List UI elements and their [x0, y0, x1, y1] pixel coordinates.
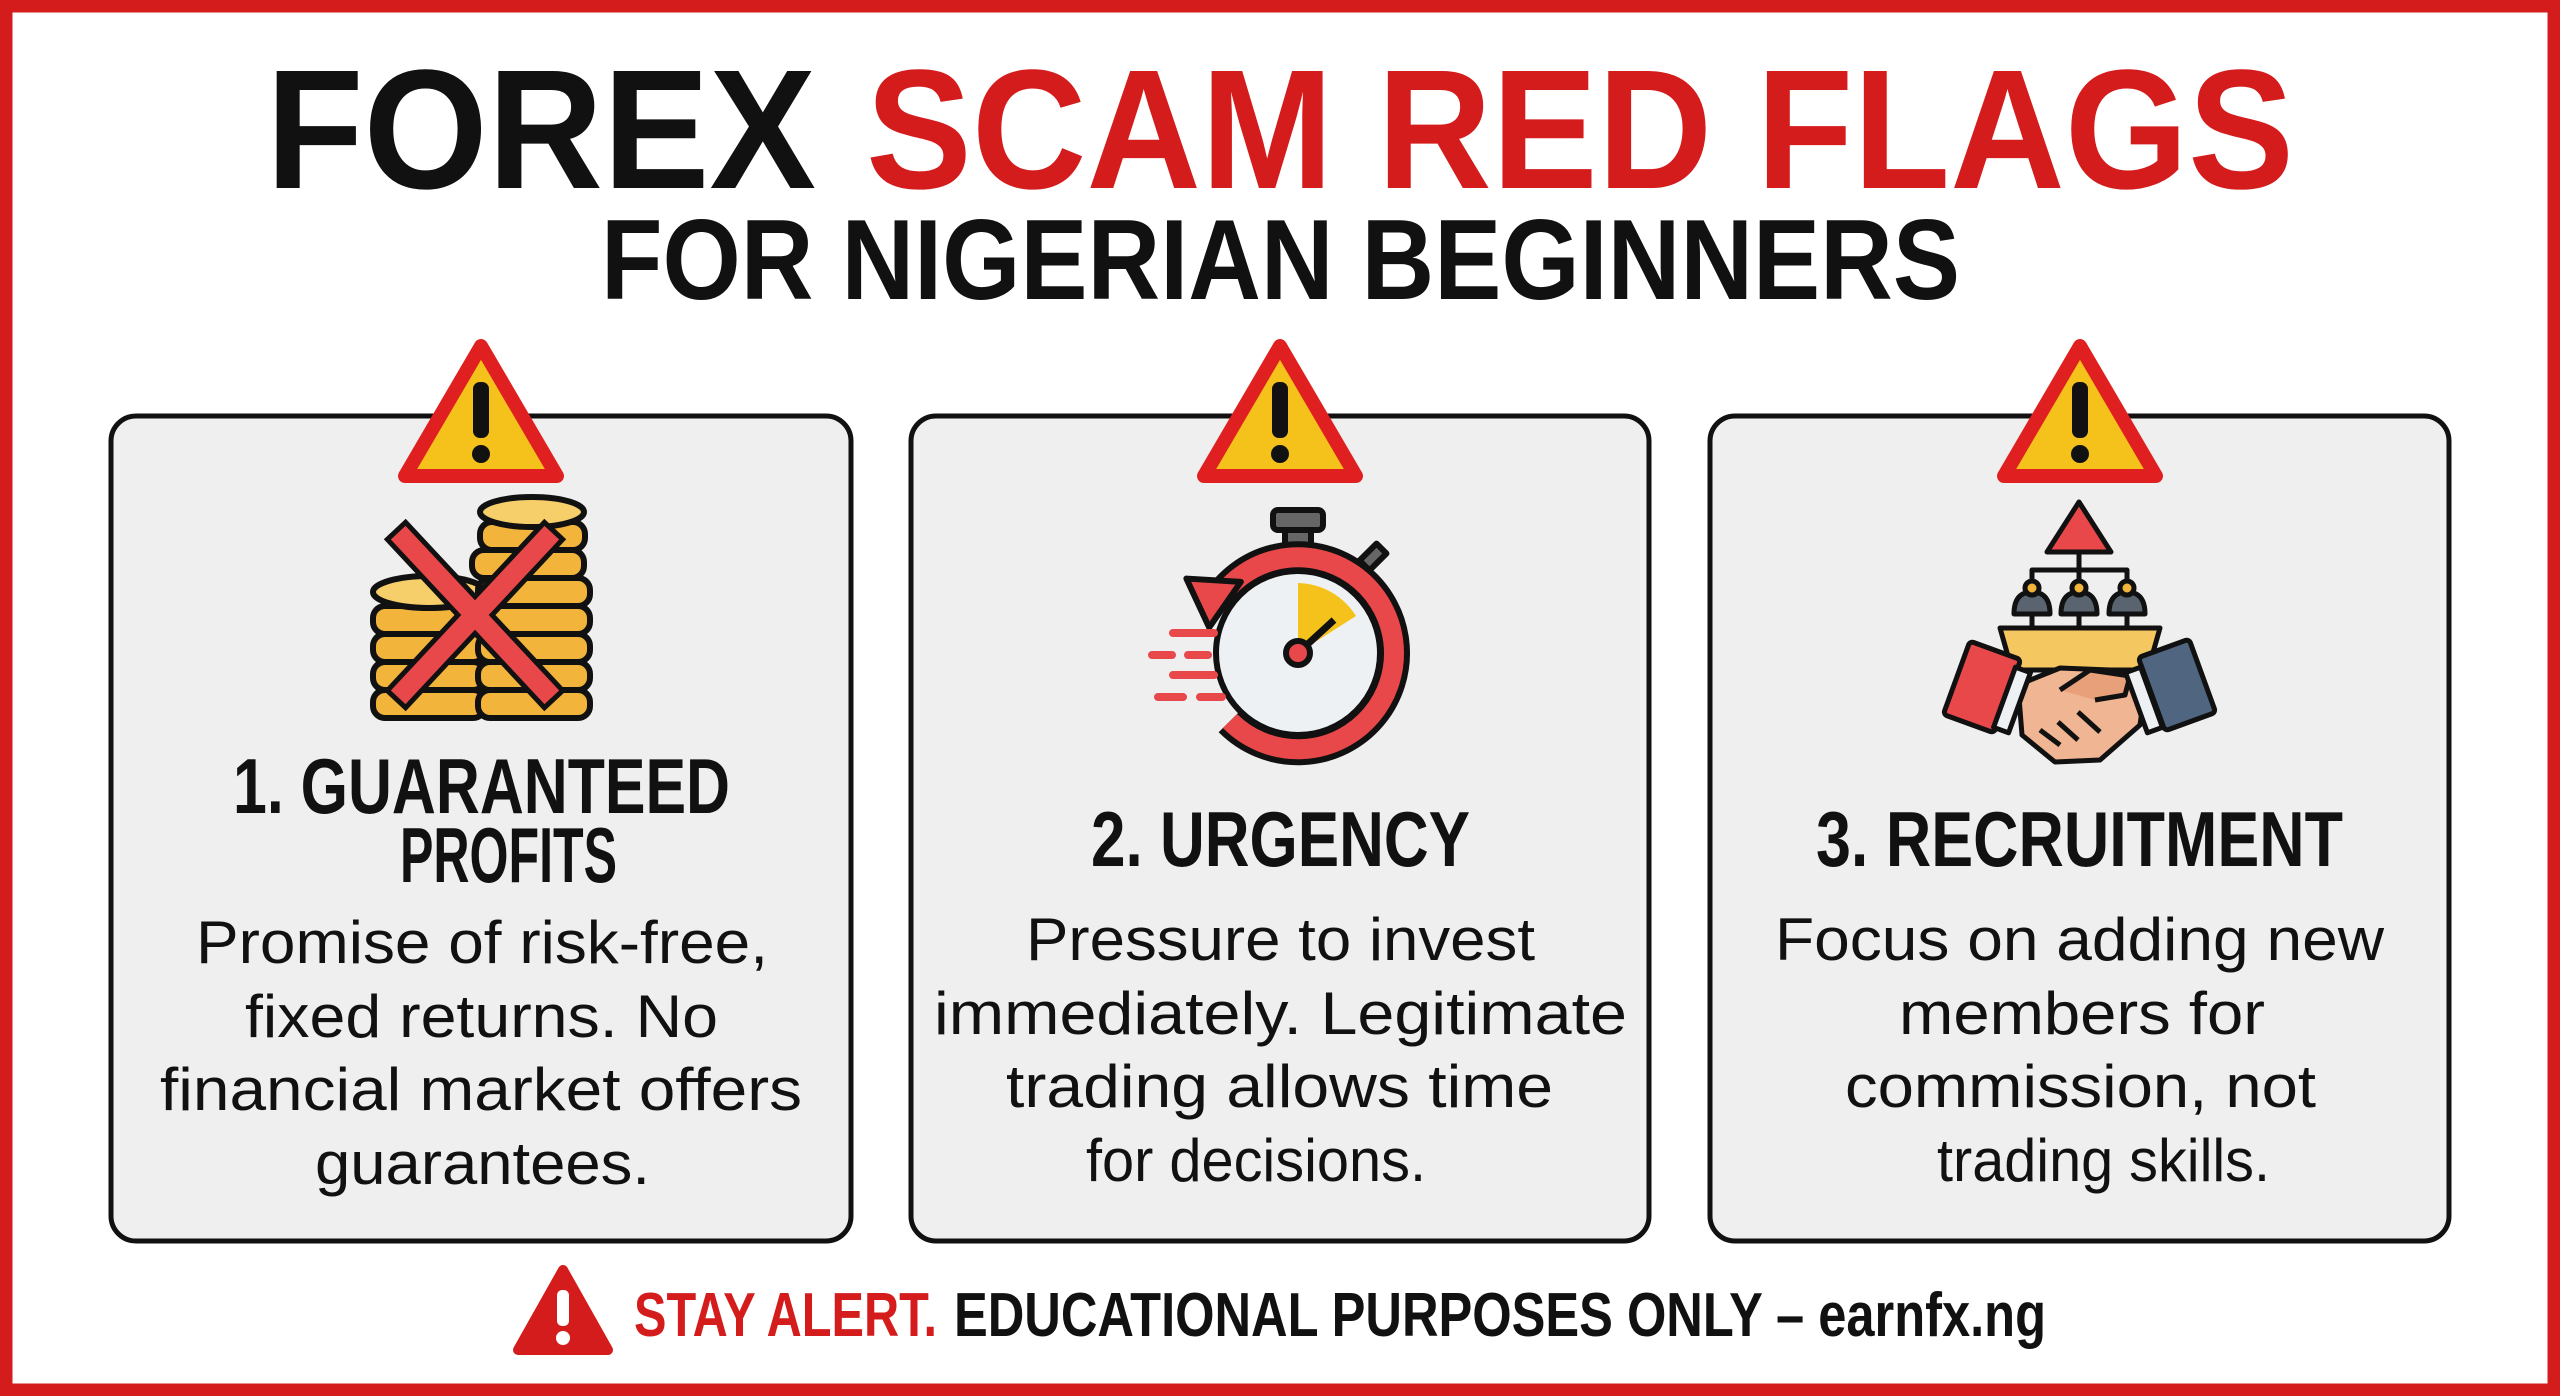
body 2: trading allows time [1006, 1053, 1553, 1120]
footer [518, 1270, 2046, 1350]
body 2: immediately. Legitimate [934, 980, 1627, 1047]
panel: recruitment [1710, 346, 2449, 1241]
icon: coins with red X [373, 497, 590, 718]
icon: warning triangle 1 [405, 346, 557, 476]
body 1: financial market offers [160, 1056, 802, 1123]
body 3: members for [1899, 980, 2265, 1047]
heading 1: PROFITS [400, 811, 617, 899]
heading 2: 2. URGENCY [1091, 795, 1470, 883]
heading 1 [233, 742, 730, 899]
body 1: fixed returns. No [245, 983, 718, 1050]
panel: urgency [911, 346, 1649, 1241]
icon: pyramid handshake [1943, 502, 2216, 762]
heading 3: 3. RECRUITMENT [1816, 795, 2343, 883]
body 1 [160, 909, 802, 1197]
footer: STAY ALERT. [634, 1281, 937, 1350]
body 2 [934, 906, 1627, 1194]
title: FOREX [266, 35, 816, 225]
body 1: Promise of risk-free, [196, 909, 768, 976]
icon: footer warning [518, 1270, 608, 1350]
body 2: for decisions. [1086, 1127, 1426, 1194]
heading 1: 1. GUARANTEED [233, 742, 730, 830]
body 3: commission, not [1845, 1053, 2316, 1120]
footer: EDUCATIONAL PURPOSES ONLY – earnfx.ng [954, 1281, 2046, 1350]
title: SCAM RED FLAGS [866, 35, 2294, 225]
title [266, 35, 2294, 225]
icon: warning triangle 3 [2004, 346, 2156, 476]
icon: stopwatch [1152, 510, 1394, 749]
body 3 [1775, 906, 2385, 1194]
body 3: Focus on adding new [1775, 906, 2385, 973]
body 1: guarantees. [315, 1130, 650, 1197]
panel: guaranteed profits [111, 346, 851, 1241]
body 2: Pressure to invest [1026, 906, 1535, 973]
subtitle: FOR NIGERIAN BEGINNERS [601, 197, 1960, 324]
icon: warning triangle 2 [1204, 346, 1356, 476]
body 3: trading skills. [1937, 1127, 2270, 1194]
